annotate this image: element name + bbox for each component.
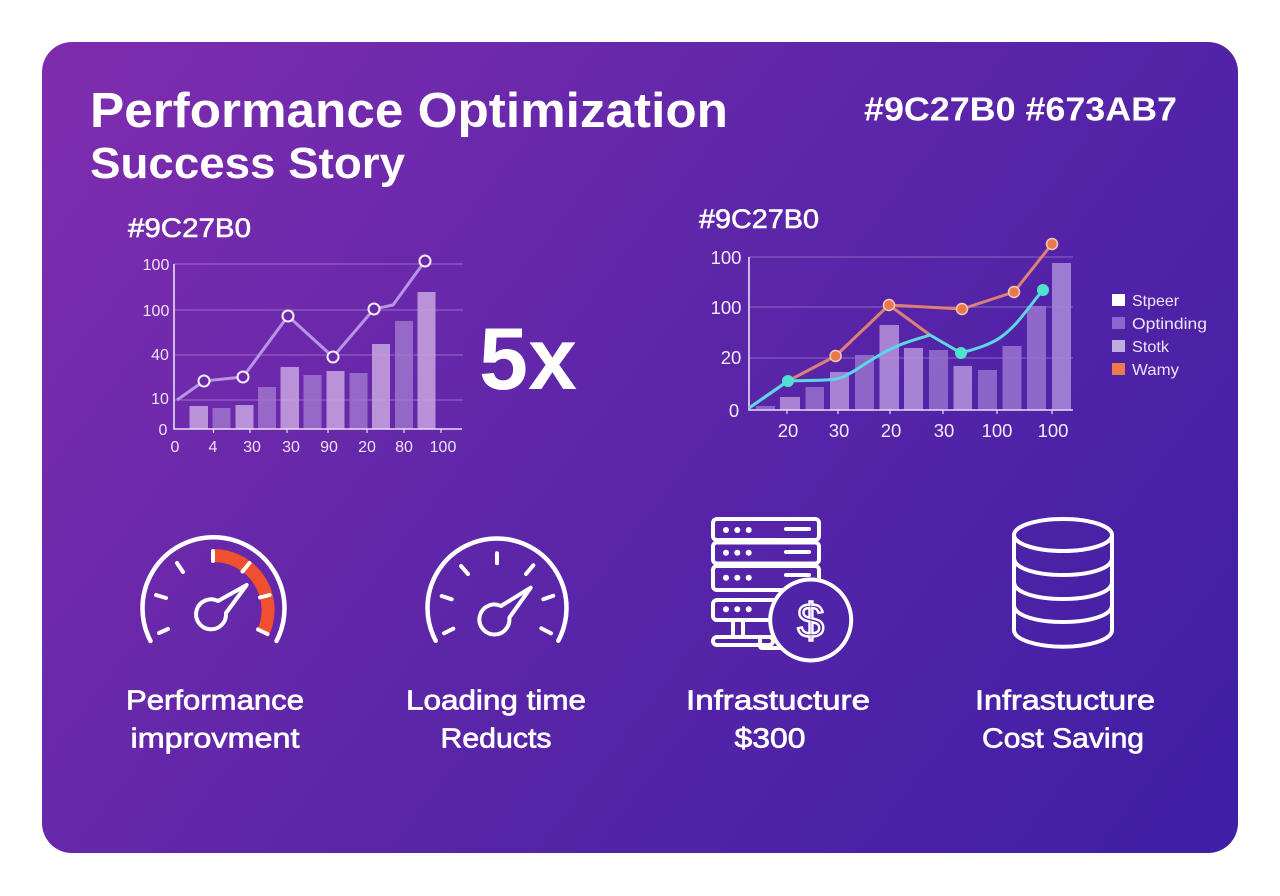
x axis labels: left chart: 100 [430,439,456,456]
icon: speedometer with red zone [143,537,284,641]
label: infrastructure cost saving: Infrastucture [975,684,1155,716]
y axis labels: left chart: 10 [151,391,169,408]
x axis labels: right chart: 20 [881,420,901,441]
x axis labels: right chart [778,420,1068,441]
y axis labels: left chart [143,257,169,439]
x axis labels: left chart: 0 [171,439,180,456]
x axis labels: left chart: 90 [320,439,338,456]
x axis labels: left chart: 80 [395,439,413,456]
label: infrastructure cost [686,684,870,754]
legend [1112,293,1207,379]
y axis labels: right chart: 20 [721,347,741,368]
y axis labels: left chart: 0 [159,422,168,439]
label: performance improvement: improvment [130,722,300,754]
label: loading time [406,684,586,754]
x axis labels: left chart [171,439,456,456]
y axis labels: right chart: 100 [711,297,741,318]
y axis labels: right chart: 100 [711,247,741,268]
chart: right bar and multi-line chart [711,238,1073,441]
colour codes heading: #9C27B0 #673AB7 [864,90,1177,128]
label: infrastructure cost saving [975,684,1155,754]
title: Performance Optimization [90,84,728,138]
label: infrastructure cost: $300 [734,722,806,754]
label: infrastructure cost: Infrastucture [686,684,870,716]
chart heading: left: #9C27B0 [128,213,251,243]
x axis labels: left chart: 30 [243,439,261,456]
line series: left chart [177,256,430,400]
title [90,84,728,188]
y axis labels: left chart: 40 [151,347,169,364]
label: performance improvement [126,684,304,754]
legend: Optinding [1132,316,1207,333]
x axis labels: right chart: 100 [982,420,1012,441]
icon: server rack with dollar coin: $ [797,595,824,648]
y axis labels: left chart: 100 [143,257,169,274]
cyan line series [749,284,1049,408]
bars: right chart [756,263,1071,410]
x axis labels: right chart: 100 [1038,420,1068,441]
x axis labels: right chart: 30 [934,420,954,441]
chart heading: right: #9C27B0 [699,204,819,234]
title: Success Story [90,139,406,188]
legend: Stotk [1132,339,1170,356]
label: loading time: Loading time [406,684,586,716]
legend: Wamy [1132,362,1179,379]
label: infrastructure cost saving: Cost Saving [982,722,1144,754]
y axis labels: right chart: 0 [729,400,739,421]
bars: left chart [190,292,436,429]
label: performance improvement: Performance [126,684,304,716]
x axis labels: left chart: 30 [282,439,300,456]
x axis labels: left chart: 20 [358,439,376,456]
legend: Stpeer [1132,293,1180,310]
icon: server rack with dollar coin [713,519,851,660]
big stat: 5x [479,309,577,408]
y axis labels: right chart [711,247,741,421]
orange line series [749,238,1058,408]
x axis labels: left chart: 4 [209,439,218,456]
x axis labels: right chart: 20 [778,420,798,441]
label: loading time: Reducts [440,722,552,754]
icon: database [1014,519,1112,647]
y axis labels: left chart: 100 [143,303,169,320]
x axis labels: right chart: 30 [829,420,849,441]
icon: speedometer [428,538,566,641]
chart: left bar and line chart [143,256,463,456]
